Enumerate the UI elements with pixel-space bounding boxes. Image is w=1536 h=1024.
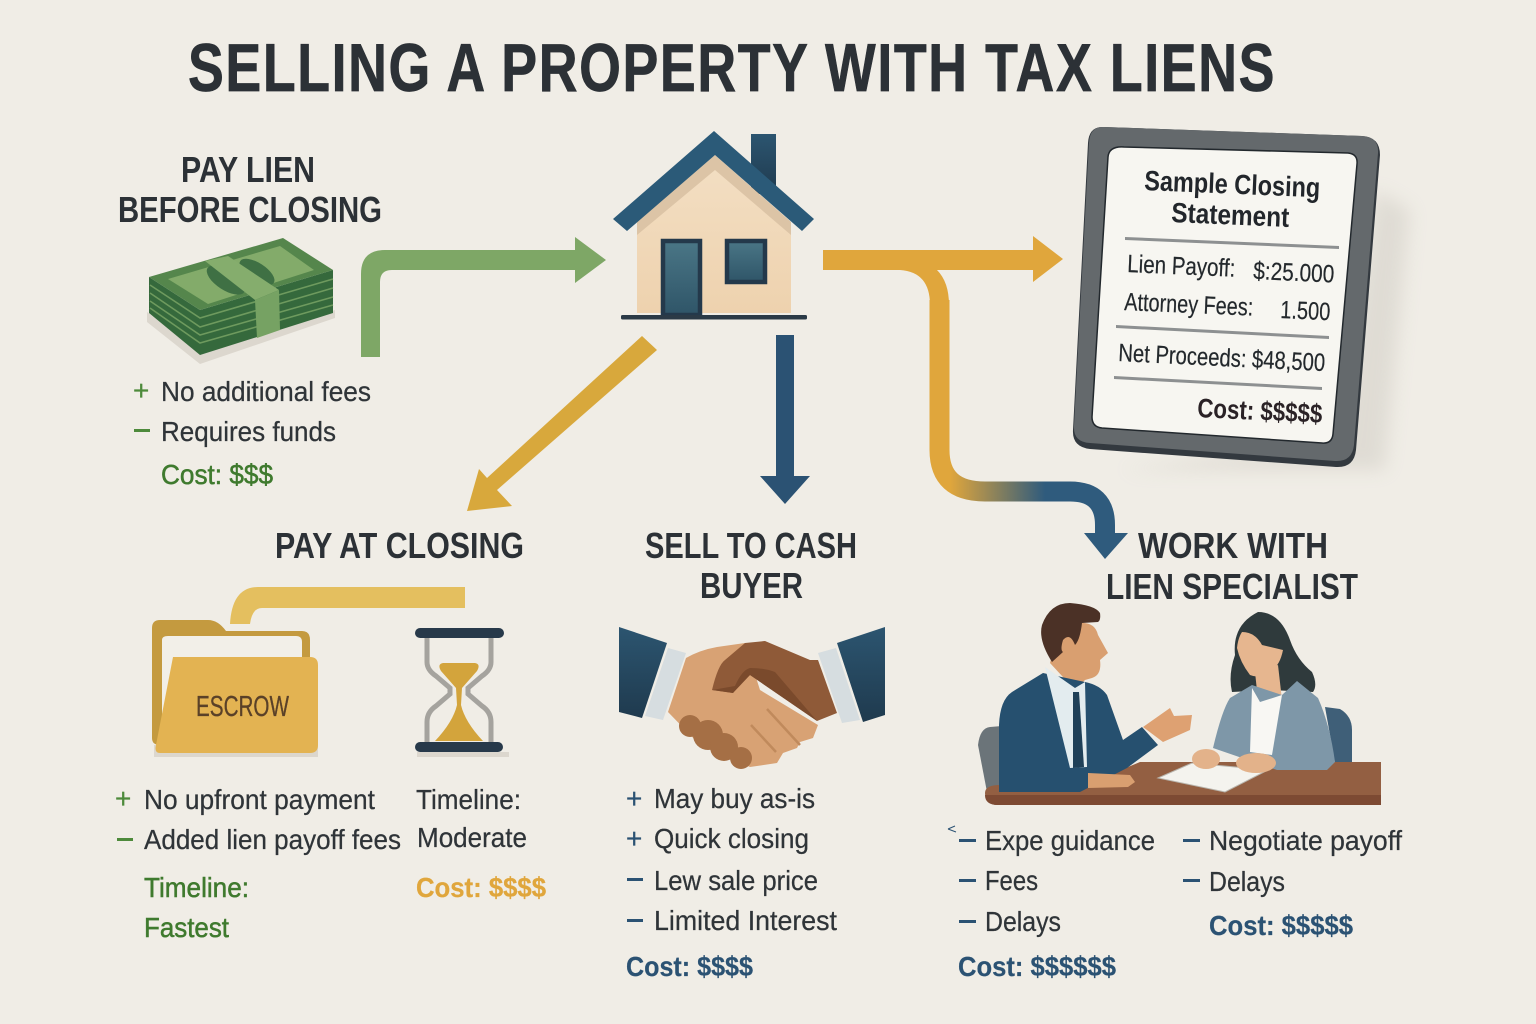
- pros and cons: Timeline:: [416, 784, 521, 815]
- heading: pay lien: PAY LIEN: [181, 149, 315, 190]
- chairs: [978, 726, 1002, 792]
- pros and cons: [133, 375, 371, 490]
- statement heading: Sample Closing: [1144, 165, 1321, 203]
- pros and cons: Delays: [985, 906, 1061, 937]
- pros and cons: [115, 783, 546, 943]
- icon: handshake: [619, 627, 885, 769]
- pros and cons: Lew sale price: [654, 865, 818, 896]
- arrow: green: [361, 237, 606, 357]
- heading: [1106, 525, 1358, 607]
- arrow: to lien specialist: [900, 270, 1128, 559]
- panel: sample closing statement: [1073, 127, 1410, 470]
- panel: work with lien specialist: [948, 525, 1402, 982]
- woman: [1231, 612, 1315, 692]
- pros and cons: Cost: $$$$: [416, 872, 546, 903]
- statement rows: $:25.000: [1253, 257, 1335, 289]
- heading: pay lien: [118, 149, 382, 230]
- pros and cons: Fastest: [144, 912, 229, 943]
- panel: sell to cash buyer: [619, 525, 885, 982]
- statement rows: Attorney Fees:: [1124, 288, 1254, 322]
- table: [985, 762, 1381, 805]
- statement heading: [1144, 165, 1321, 233]
- icon: escrow folder: ESCROW: [196, 691, 289, 723]
- statement heading: Statement: [1171, 197, 1290, 233]
- arrow: to closing statement: [823, 236, 1063, 282]
- statement rows: 1.500: [1280, 296, 1331, 326]
- icon: escrow folder: [152, 620, 318, 757]
- heading: BUYER: [700, 565, 803, 606]
- pros and cons: Cost: $$$: [161, 459, 273, 490]
- illustration: meeting: [978, 603, 1381, 805]
- statement rows: [1118, 250, 1335, 377]
- icon: hourglass: [415, 628, 509, 757]
- statement rows: Lien Payoff:: [1127, 250, 1236, 283]
- connector: [230, 587, 465, 624]
- pros and cons: Quick closing: [654, 823, 809, 854]
- pros and cons: [626, 783, 837, 982]
- pros and cons: No additional fees: [161, 376, 371, 407]
- pros and cons: +: [115, 783, 131, 814]
- pros and cons: Cost: $$$$$: [1209, 910, 1353, 941]
- pros and cons: Cost: $$$$: [626, 951, 753, 982]
- panel: pay at closing: [115, 525, 546, 943]
- pros and cons: +: [626, 823, 642, 854]
- arrow: to cash buyer: [760, 335, 810, 504]
- pros and cons: Delays: [1209, 866, 1285, 897]
- pros and cons: Added lien payoff fees: [144, 824, 401, 855]
- panel: pay lien before closing: [118, 149, 606, 490]
- statement rows: Net Proceeds: $48,500: [1118, 339, 1326, 377]
- heading: SELL TO CASH: [645, 525, 857, 566]
- heading: pay lien: BEFORE CLOSING: [118, 189, 382, 230]
- pros and cons: Cost: $$$$$$: [958, 951, 1116, 982]
- statement paper: [1092, 147, 1357, 443]
- tablet frame: [1073, 127, 1380, 467]
- paper: [1158, 763, 1268, 792]
- pros and cons: Expe guidance: [985, 825, 1155, 856]
- pros and cons: [958, 825, 1402, 982]
- pros and cons: Moderate: [417, 822, 527, 853]
- stray tick: [948, 826, 956, 832]
- arrow: to pay at closing: [467, 336, 657, 511]
- heading: WORK WITH: [1138, 525, 1328, 566]
- heading: [645, 525, 857, 606]
- title: SELLING A PROPERTY WITH TAX LIENS: [188, 30, 1276, 106]
- pros and cons: +: [133, 375, 149, 406]
- pros and cons: Fees: [985, 865, 1038, 896]
- hands: [1192, 749, 1220, 769]
- man: [1050, 623, 1108, 690]
- pros and cons: Requires funds: [161, 416, 336, 447]
- shadow: [1120, 190, 1410, 470]
- pros and cons: Timeline:: [144, 872, 249, 903]
- icon: house: [613, 131, 814, 320]
- pros and cons: Negotiate payoff: [1209, 825, 1402, 856]
- pros and cons: No upfront payment: [144, 784, 375, 815]
- pros and cons: May buy as-is: [654, 783, 815, 814]
- panel: sample closing statement: Cost: $$$$$: [1197, 393, 1323, 429]
- heading: LIEN SPECIALIST: [1106, 566, 1358, 607]
- pros and cons: +: [626, 783, 642, 814]
- heading: PAY AT CLOSING: [275, 525, 524, 566]
- pros and cons: Limited Interest: [654, 905, 837, 936]
- icon: cash stack: [147, 238, 335, 364]
